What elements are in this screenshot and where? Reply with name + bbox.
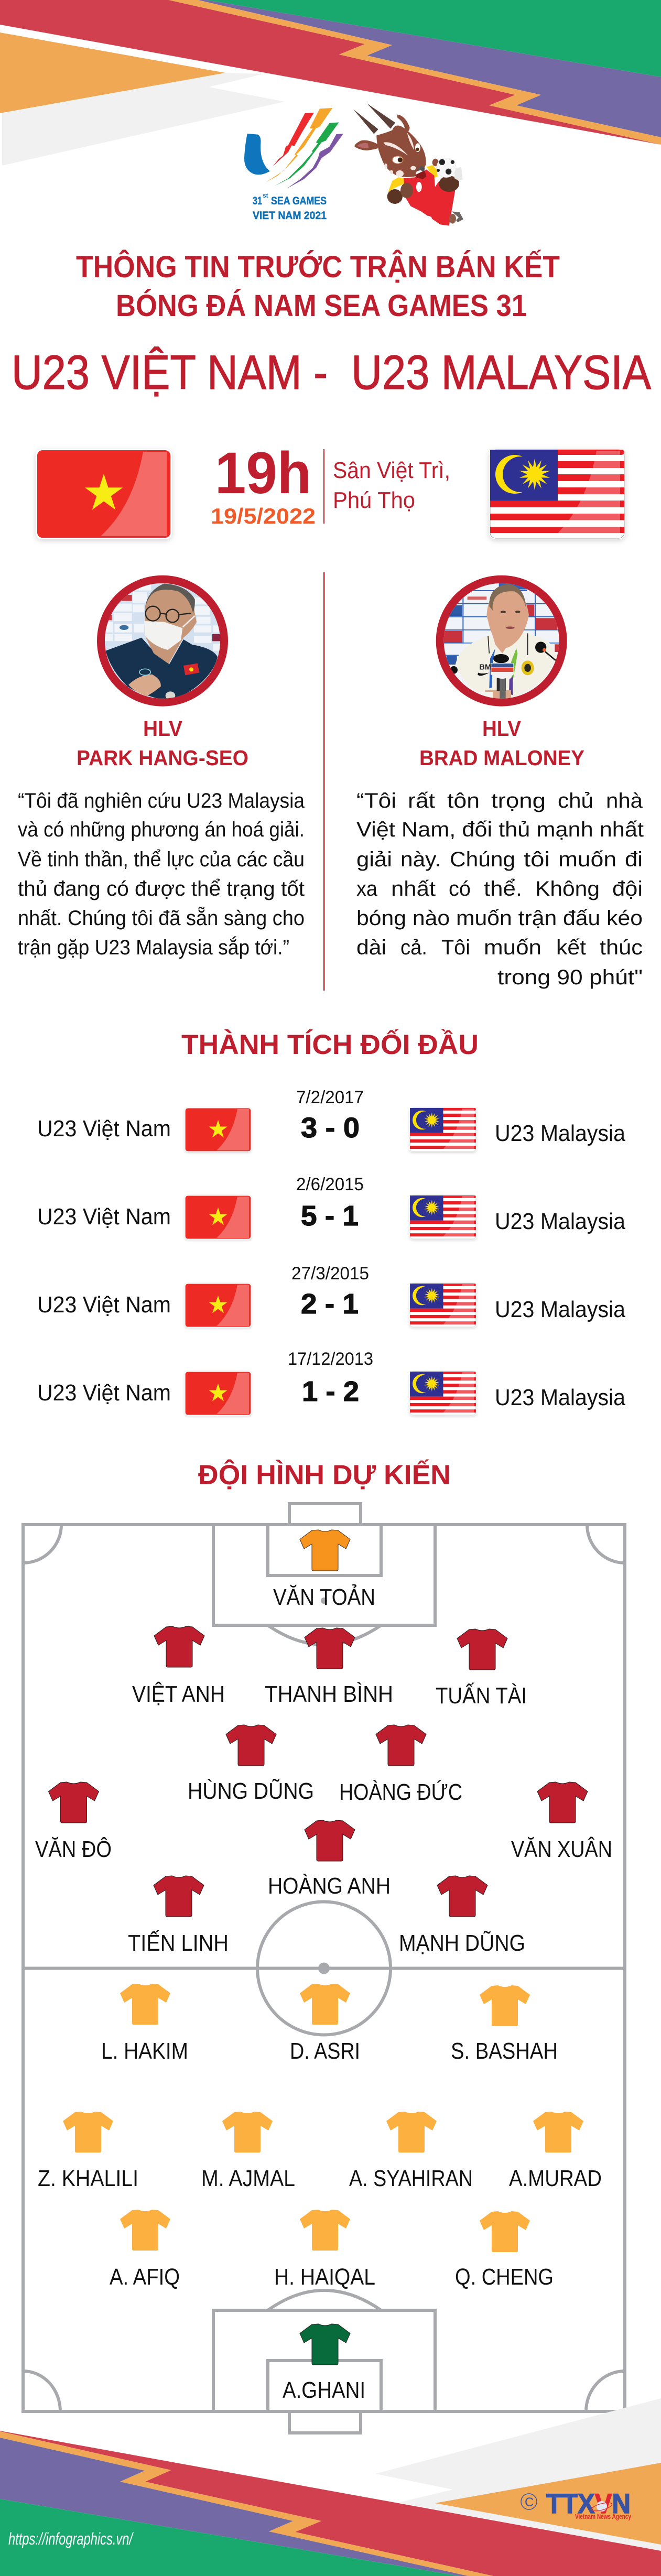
quote: chủ [558,789,593,812]
quote: trận gặp U23 Malaysia sắp tới.” [18,936,289,959]
quote: Chúng [450,848,515,871]
match time and venue [211,440,450,528]
panel: head-to-head results [37,1088,625,1416]
coach name: PARK HANG-SEO [77,746,248,770]
quote: cả. [400,936,427,959]
player: Việt Anh [132,1626,225,1707]
player: A. Afiq: A. AFIQ [110,2264,180,2290]
quote: này. [400,848,441,871]
title: BÓNG ĐÁ NAM SEA GAMES 31 [116,289,527,323]
player: A. Syahiran: A. SYAHIRAN [349,2166,473,2191]
player: Q. Cheng: Q. CHENG [455,2264,554,2290]
player: L. Hakim [101,1984,188,2064]
match row 7/2/2017 [37,1088,625,1153]
quote: Không [535,877,600,900]
player: A.Ghani: A.GHANI [283,2377,365,2403]
player: Tuấn Tài: TUẤN TÀI [436,1682,527,1709]
quote: giải [356,848,392,871]
match row 2/6/2015: U23 Việt Nam [37,1204,171,1230]
heading: expected line-up: ĐỘI HÌNH DỰ KIẾN [198,1459,451,1491]
player: H. Haiqal [274,2210,375,2290]
player: Văn Đô: VĂN ĐÔ [35,1836,112,1862]
player: Tiến Linh [128,1876,229,1956]
player: S. Bashah [451,1985,558,2064]
flag: Malaysia [489,449,625,541]
match row 17/12/2013: U23 Việt Nam [37,1380,171,1406]
player: L. Hakim: L. HAKIM [101,2038,188,2064]
coach name: BRAD MALONEY [419,746,584,770]
quote [356,789,644,989]
player: D. Asri [290,1984,360,2064]
match row 2/6/2015: 5 - 1 [301,1200,359,1232]
logo: TTXVN: TTXVN [546,2488,631,2519]
quote: tôn [447,789,480,812]
quote: nhất [391,877,436,900]
logo: SEA Games 31: VIET NAM 2021 [253,210,327,222]
quote: Về tinh thần, thể lực của các cầu [18,848,305,871]
logo: SEA Games 31 [244,108,343,222]
quote: tôi [524,848,550,871]
quote: thể. [484,877,522,900]
quote: nhất. Chúng tôi đã sẵn sàng cho [18,906,305,930]
coach name [419,716,584,770]
quote [18,789,305,959]
pitch [23,1504,625,2433]
quote: dài [356,936,386,959]
player: A. Afiq [110,2210,180,2290]
logo: SEA Games 31: st [263,192,268,199]
match row 27/3/2015 [37,1264,625,1328]
team: U23 Malaysia line-up [38,1984,602,2403]
player: Hùng Dũng: HÙNG DŨNG [188,1778,314,1804]
player: Hoàng Đức: HOÀNG ĐỨC [339,1779,462,1805]
quote: có [449,877,471,900]
logo: TTXVN: C [525,2495,534,2509]
quote: thủ đang có được thể trạng tốt [18,877,305,900]
match row 2/6/2015: 2/6/2015 [296,1175,364,1194]
match time and venue: 19/5/2022 [211,504,316,528]
match row 17/12/2013: 1 - 2 [302,1376,359,1407]
quote: muốn [558,848,616,871]
coach name: HLV [482,716,522,741]
player: M. Ajmal [201,2112,295,2191]
quote: muốn [484,936,541,959]
match row 7/2/2017: U23 Malaysia [495,1121,625,1146]
heading: head-to-head record: THÀNH TÍCH ĐỐI ĐẦU [181,1029,479,1060]
quote: đi [625,848,643,871]
player: Thanh Bình: THANH BÌNH [265,1681,393,1707]
match row 2/6/2015 [37,1175,625,1240]
player: Hùng Dũng [188,1725,314,1804]
title [76,250,560,323]
quote: trọng [491,789,546,812]
quote: thúc [600,936,643,959]
player: Văn Đô [35,1782,112,1862]
match time and venue: Sân Việt Trì, [333,458,450,483]
player: Tuấn Tài [436,1629,527,1709]
quote: trong 90 phút" [497,966,643,989]
player: Z. Khalili: Z. KHALILI [38,2166,138,2191]
player: A.Murad: A.MURAD [509,2166,602,2191]
match row 7/2/2017: 7/2/2017 [296,1088,364,1107]
logo: SEA Games 31: SEA GAMES [271,195,327,207]
flag: Vietnam [36,449,172,541]
panel: coach Brad Maloney [356,575,644,989]
player: Văn Toản [273,1530,375,1610]
player: Q. Cheng [455,2211,554,2290]
website url: https://infographics.vn/ [8,2529,134,2548]
portrait: Brad Maloney: BM [479,664,491,672]
player: Tiến Linh: TIẾN LINH [128,1930,229,1956]
player: D. Asri: D. ASRI [290,2038,360,2064]
player: Mạnh Dũng [399,1876,525,1956]
quote: nhà [606,789,643,812]
match row 17/12/2013 [37,1349,625,1416]
player: S. Bashah: S. BASHAH [451,2038,558,2064]
match row 7/2/2017: 3 - 0 [301,1112,360,1144]
logo: SEA Games 31: 31 [253,195,262,207]
player: A.Murad [509,2112,602,2191]
player: H. Haiqal: H. HAIQAL [274,2264,375,2290]
match time and venue: 19h [215,440,311,506]
match row 17/12/2013: U23 Malaysia [495,1385,625,1410]
player: Văn Toản: VĂN TOẢN [273,1584,375,1610]
quote: và có những phương án hoá giải. [18,818,305,841]
quote: Tôi [441,936,470,959]
player: Thanh Bình [265,1628,393,1707]
title: THÔNG TIN TRƯỚC TRẬN BÁN KẾT [76,250,560,284]
quote: “Tôi đã nghiên cứu U23 Malaysia [18,789,305,812]
match row 27/3/2015: U23 Malaysia [495,1297,625,1322]
quote: đội [612,877,643,900]
match row 2/6/2015: U23 Malaysia [495,1209,625,1234]
player: Mạnh Dũng: MẠNH DŨNG [399,1930,525,1956]
logo: TTXVN: Vietnam News Agency [575,2512,631,2520]
portrait: Park Hang-seo [97,575,228,707]
player: Việt Anh: VIỆT ANH [132,1681,225,1707]
top decorative banner [0,0,661,166]
team: U23 Việt Nam line-up [35,1530,612,1956]
player: A. Syahiran [349,2112,473,2191]
match row 27/3/2015: U23 Việt Nam [37,1292,171,1318]
player: Hoàng Anh: HOÀNG ANH [268,1873,391,1899]
player: Hoàng Anh [268,1820,391,1899]
coach name [77,716,248,770]
player: M. Ajmal: M. AJMAL [201,2166,295,2191]
player: Z. Khalili [38,2112,138,2191]
icon: mascot with football [353,103,463,226]
quote: xa [356,877,378,900]
bottom decorative banner [0,2398,661,2576]
player: Văn Xuân [511,1782,612,1862]
player: Hoàng Đức [339,1725,462,1805]
player: Văn Xuân: VĂN XUÂN [511,1836,612,1862]
match row 7/2/2017: U23 Việt Nam [37,1116,171,1142]
match row 27/3/2015: 2 - 1 [301,1288,359,1320]
match row 27/3/2015: 27/3/2015 [291,1264,369,1284]
panel: coach Park Hang-seo [18,575,305,959]
quote: rất [408,789,435,812]
quote: Việt Nam, đối thủ mạnh nhất [356,818,644,841]
match row 17/12/2013: 17/12/2013 [288,1349,373,1369]
player: A.Ghani [283,2324,365,2403]
quote: bóng nào muốn trận đấu kéo [356,907,643,930]
quote: “Tôi [356,789,396,812]
portrait: Brad Maloney [436,575,567,707]
quote: kết [556,936,586,959]
coach name: HLV [143,716,183,741]
match time and venue: Phú Thọ [333,487,415,513]
